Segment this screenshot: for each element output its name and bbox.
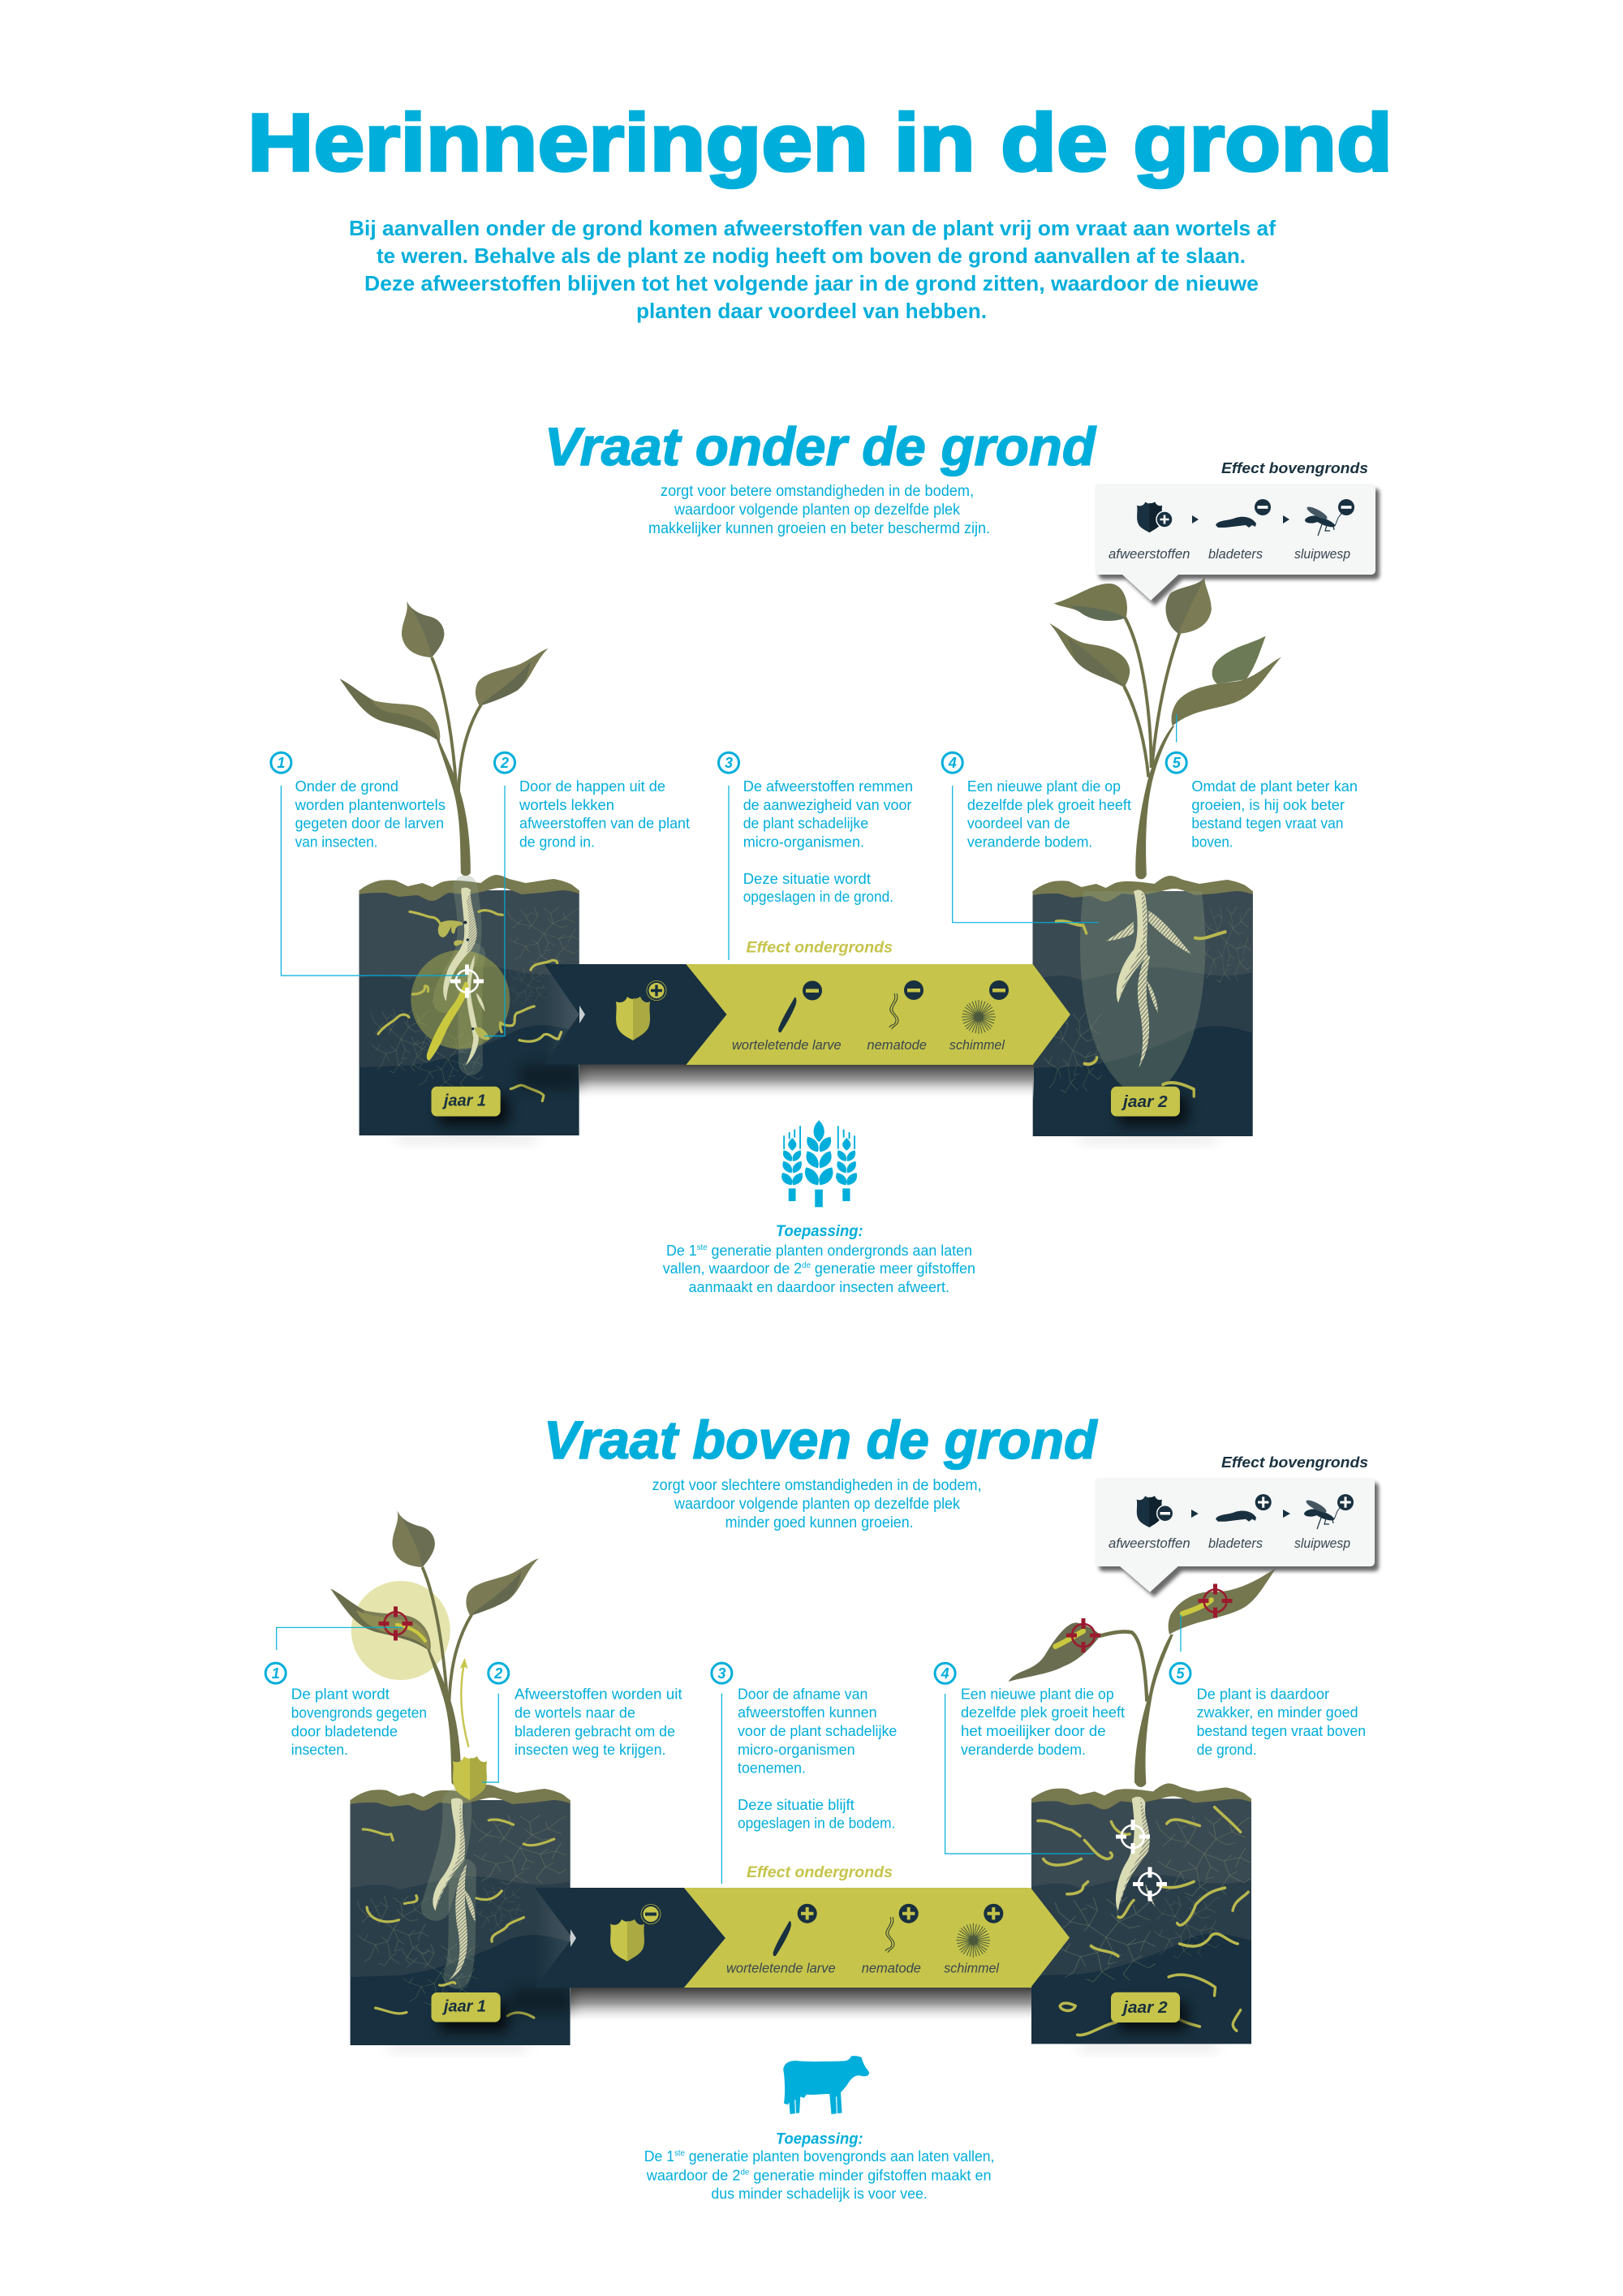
badge jaar 1: jaar 1 xyxy=(441,1092,486,1110)
callout labels: sluipwesp xyxy=(1294,1536,1350,1551)
step 4 section 1 xyxy=(942,752,1131,923)
soil year 1 section 1 xyxy=(359,875,579,1143)
application text section 2: Toepassing: xyxy=(776,2131,863,2148)
step 5 section 1: Omdat de plant beter kan xyxy=(1191,778,1358,795)
step 3 section 1: De afweerstoffen remmen xyxy=(743,778,913,795)
application text section 1: Toepassing: xyxy=(776,1223,863,1240)
callout: effect bovengronds section 2 xyxy=(1095,1478,1379,1597)
heading: Vraat onder de grond: Vraat onder de grond xyxy=(545,416,1097,476)
step 5 section 1 xyxy=(1166,714,1358,851)
step 3 section 2 xyxy=(712,1663,897,1884)
band labels xyxy=(726,1961,1000,1976)
label: effect ondergronds: Effect ondergronds xyxy=(747,940,893,957)
step 2 section 1 xyxy=(484,752,690,1036)
step 5 section 2: bestand tegen vraat boven xyxy=(1197,1722,1366,1739)
band labels: nematode xyxy=(867,1037,927,1053)
subheading section 2: waardoor volgende planten op dezelfde plek xyxy=(674,1496,960,1513)
step 4 section 2: Een nieuwe plant die op xyxy=(961,1685,1114,1702)
subheading section 1: makkelijker kunnen groeien en beter beschermd zijn. xyxy=(648,520,990,537)
step 2 section 2: bladeren gebracht om de xyxy=(514,1722,675,1739)
step 4 section 2: dezelfde plek groeit heeft xyxy=(961,1704,1125,1721)
step 5 section 2: de grond. xyxy=(1197,1741,1257,1758)
label: effect ondergronds section 2: Effect ondergronds xyxy=(747,1864,893,1881)
leaf damage and arrow xyxy=(356,1610,468,1747)
plant year 1 section 2 xyxy=(330,1511,539,1786)
icon: caterpillar minus xyxy=(1216,499,1271,528)
intro text block xyxy=(349,216,1276,323)
application text section 2: generatie planten bovengronds aan laten vallen, xyxy=(685,2147,995,2165)
plant year 1 section 1 xyxy=(340,601,549,876)
badge jaar 2 section 2 xyxy=(1111,1992,1187,2031)
application text section 1: generatie meer gifstoffen xyxy=(811,1260,975,1277)
subheading section 1 xyxy=(648,483,990,537)
larva eating root xyxy=(427,981,468,1061)
icon: cow xyxy=(783,2056,869,2114)
step 3 section 2: voor de plant schadelijke xyxy=(738,1722,897,1739)
badge jaar 2 section 2: jaar 2 xyxy=(1121,1999,1168,2017)
step 4 section 2: het moeilijker door de xyxy=(961,1722,1106,1739)
subheading section 2: zorgt voor slechtere omstandigheden in de bodem, xyxy=(652,1477,982,1494)
application text section 2: De 1 xyxy=(644,2147,676,2165)
step 1 section 1: gegeten door de larven xyxy=(295,815,444,831)
soil year 2 section 1 xyxy=(1033,876,1253,1144)
step 4 section 2: veranderde bodem. xyxy=(961,1741,1086,1758)
application text section 2: ste xyxy=(674,2149,685,2158)
step 3 section 2: micro-organismen xyxy=(738,1741,855,1758)
step 5 section 1: boven. xyxy=(1191,833,1233,851)
step 3 section 1: 3 xyxy=(725,755,733,771)
callout labels: afweerstoffen xyxy=(1109,546,1190,562)
step 3 section 2: Deze situatie blijft xyxy=(738,1796,855,1813)
step 1 section 1: 1 xyxy=(277,755,285,771)
target marker xyxy=(450,964,484,998)
soil year 1 section 2 xyxy=(351,1785,570,2052)
step 1 section 2: 1 xyxy=(272,1665,280,1682)
step 3 section 2: afweerstoffen kunnen xyxy=(738,1704,877,1721)
heading: Vraat boven de grond: Vraat boven de grond xyxy=(544,1410,1098,1470)
effect band section 2 xyxy=(511,1888,1070,2023)
application text section 2: dus minder schadelijk is voor vee. xyxy=(711,2185,928,2202)
band labels: schimmel xyxy=(944,1961,1000,1976)
step 3 section 1: de plant schadelijke xyxy=(743,815,868,831)
step 5 section 2: 5 xyxy=(1176,1665,1185,1682)
icon: wasp minus xyxy=(1304,499,1354,536)
icon: caterpillar plus xyxy=(1216,1494,1272,1522)
step 2 section 1: wortels lekken xyxy=(519,796,614,813)
band labels: nematode xyxy=(862,1961,921,1976)
intro text block: planten daar voordeel van hebben. xyxy=(636,299,987,323)
step 1 section 1: van insecten. xyxy=(295,833,378,851)
step 5 section 1: bestand tegen vraat van xyxy=(1191,815,1344,831)
step 1 section 1 xyxy=(271,752,467,976)
step 1 section 1: Onder de grond xyxy=(295,778,398,795)
icon: shield minus xyxy=(610,1904,661,1962)
application text section 2: waardoor de 2 xyxy=(647,2167,743,2184)
root system and worms xyxy=(1038,1797,1248,2035)
callout labels: bladeters xyxy=(1208,546,1263,562)
target markers on leaves xyxy=(1066,1584,1232,1652)
step 3 section 1: Deze situatie wordt xyxy=(743,870,871,887)
icon: root larva minus xyxy=(778,980,822,1032)
step 4 section 1: Een nieuwe plant die op xyxy=(967,778,1121,795)
band shadow xyxy=(579,1064,1034,1100)
application text section 2: de xyxy=(740,2169,750,2178)
root system with halo xyxy=(1056,890,1225,1096)
badge jaar 2: jaar 2 xyxy=(1121,1093,1168,1111)
badge jaar 1 section 2 xyxy=(432,1992,508,2031)
intro text block: Bij aanvallen onder de grond komen afweerstoffen van de plant vrij om vraat aan wortels af xyxy=(349,216,1276,240)
step 5 section 1: groeien, is hij ook beter xyxy=(1191,796,1345,813)
application text section 1: de xyxy=(802,1261,811,1270)
root system with leaking defences xyxy=(378,887,562,1101)
icon: root larva plus xyxy=(773,1904,817,1956)
step 2 section 2: insecten weg te krijgen. xyxy=(514,1741,665,1758)
step 2 section 2 xyxy=(482,1663,682,1782)
icon: defence shield plus xyxy=(1137,502,1173,532)
application text section 1: De 1 xyxy=(666,1242,698,1259)
step 5 section 1: 5 xyxy=(1173,755,1182,771)
application text section 1: generatie planten ondergronds aan laten xyxy=(708,1242,972,1259)
step 2 section 2: 2 xyxy=(493,1665,502,1682)
plant year 2 section 1 xyxy=(1049,577,1281,879)
subheading section 2 xyxy=(652,1477,982,1531)
icon: defence shield on stem xyxy=(453,1756,487,1800)
step 4 section 1: veranderde bodem. xyxy=(967,833,1092,851)
step 3 section 2: Door de afname van xyxy=(738,1685,867,1702)
application text section 2: generatie minder gifstoffen maakt en xyxy=(749,2167,992,2184)
application text section 2 xyxy=(644,2131,995,2202)
step 3 section 1: micro-organismen. xyxy=(743,833,864,851)
target marker on leaf xyxy=(378,1606,412,1640)
icon: nematode plus xyxy=(885,1904,919,1953)
step 3 section 1: de aanwezigheid van voor xyxy=(743,796,911,813)
icon: fungus minus xyxy=(962,980,1009,1034)
badge jaar 1 xyxy=(432,1087,508,1125)
callout labels: bladeters xyxy=(1208,1536,1263,1551)
band labels: worteletende larve xyxy=(732,1037,842,1053)
target markers on root xyxy=(1116,1820,1167,1901)
dark chevron xyxy=(545,964,727,1065)
step 3 section 1 xyxy=(719,752,913,960)
band labels xyxy=(732,1037,1005,1053)
step 4 section 2: 4 xyxy=(941,1665,949,1682)
label: effect bovengronds: Effect bovengronds xyxy=(1221,460,1368,476)
subheading section 1: zorgt voor betere omstandigheden in de bodem, xyxy=(661,483,974,500)
callout labels: afweerstoffen xyxy=(1109,1536,1190,1551)
intro text block: Deze afweerstoffen blijven tot het volgende jaar in de grond zitten, waardoor de nieuwe xyxy=(364,271,1259,295)
step 2 section 2: de wortels naar de xyxy=(514,1704,635,1721)
step 4 section 1: voordeel van de xyxy=(967,815,1070,831)
step 3 section 2: toenemen. xyxy=(738,1760,806,1777)
badge jaar 2 xyxy=(1111,1087,1187,1125)
step 1 section 2: bovengronds gegeten xyxy=(291,1704,427,1721)
title: Herinneringen in de grond xyxy=(248,97,1393,188)
icon: wasp plus xyxy=(1303,1494,1354,1529)
application text section 1: ste xyxy=(697,1243,708,1252)
step 2 section 1: Door de happen uit de xyxy=(519,778,665,795)
icon: nematode minus xyxy=(889,980,923,1029)
step 1 section 2: door bladetende xyxy=(291,1722,398,1739)
step 1 section 1: worden plantenwortels xyxy=(295,796,446,813)
step 2 section 1: afweerstoffen van de plant xyxy=(519,815,690,831)
step 3 section 2: 3 xyxy=(717,1665,725,1682)
step 3 section 1: opgeslagen in de grond. xyxy=(743,888,893,905)
icon: shield plus xyxy=(616,980,666,1040)
step 2 section 1: 2 xyxy=(500,755,509,771)
badge jaar 1 section 2: jaar 1 xyxy=(441,1998,486,2016)
effect band section 1 xyxy=(519,964,1070,1100)
step 4 section 2 xyxy=(935,1663,1125,1854)
icon: wheat xyxy=(782,1122,856,1207)
application text section 1: aanmaakt en daardoor insecten afweert. xyxy=(688,1278,949,1295)
callout labels xyxy=(1109,546,1350,562)
highlight circle on leaf xyxy=(351,1581,450,1680)
callout: effect bovengronds xyxy=(1095,484,1380,605)
band labels: worteletende larve xyxy=(726,1961,836,1976)
step 1 section 2 xyxy=(265,1627,427,1758)
application text section 1: vallen, waardoor de 2 xyxy=(663,1260,807,1277)
step 3 section 2: opgeslagen in de bodem. xyxy=(738,1815,895,1832)
icon: fungus plus xyxy=(956,1904,1003,1958)
soil year 2 section 2 xyxy=(1031,1783,1251,2052)
callout labels: sluipwesp xyxy=(1294,546,1350,562)
step 4 section 1: 4 xyxy=(948,755,957,771)
root system xyxy=(363,1798,554,2018)
intro text block: te weren. Behalve als de plant ze nodig heeft om boven de grond aanvallen af te slaan. xyxy=(377,243,1246,268)
subheading section 1: waardoor volgende planten op dezelfde plek xyxy=(674,502,960,519)
step 5 section 2 xyxy=(1170,1614,1366,1758)
subheading section 2: minder goed kunnen groeien. xyxy=(725,1514,914,1531)
callout labels xyxy=(1109,1536,1350,1551)
step 5 section 2: De plant is daardoor xyxy=(1197,1685,1329,1702)
step 2 section 1: de grond in. xyxy=(519,833,595,851)
application text section 1 xyxy=(663,1223,975,1295)
step 4 section 1: dezelfde plek groeit heeft xyxy=(967,796,1131,813)
step 5 section 2: zwakker, en minder goed xyxy=(1197,1704,1358,1721)
label: effect bovengronds section 2: Effect bovengronds xyxy=(1221,1454,1368,1471)
band labels: schimmel xyxy=(949,1037,1005,1053)
step 1 section 2: De plant wordt xyxy=(291,1685,390,1702)
plant year 2 section 2 xyxy=(1009,1567,1277,1787)
step 2 section 2: Afweerstoffen worden uit xyxy=(514,1685,682,1702)
icon: defence shield minus xyxy=(1137,1496,1173,1527)
step 1 section 2: insecten. xyxy=(291,1741,348,1758)
